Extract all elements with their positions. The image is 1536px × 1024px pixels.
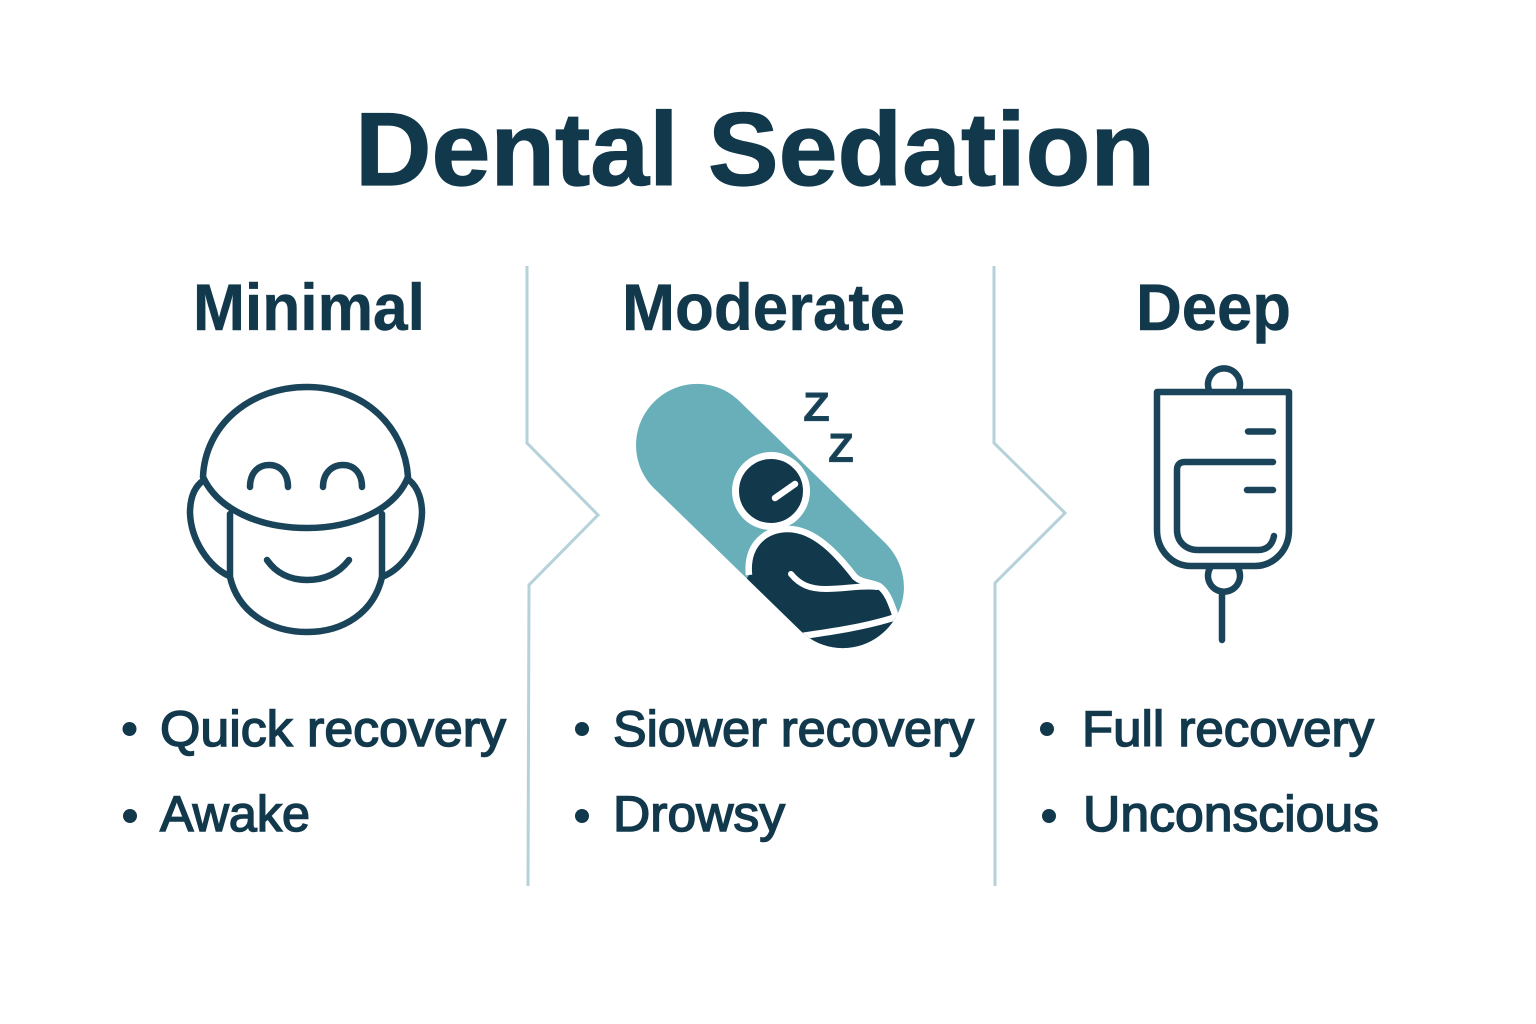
bullet: awake: Awake [160,786,310,842]
bullet: drowsy: Drowsy [613,786,785,842]
snore letters: Z [829,428,853,470]
patient head [736,456,806,526]
icon: IV drip bag [1157,368,1289,640]
infographic canvas [122,108,1378,886]
list: deep effects [1040,701,1379,842]
bullet: slower recovery: Siower recovery [613,701,974,757]
bullet: unconscious: Unconscious [1083,786,1379,842]
icon: smiling face with mask [190,387,422,632]
chevron divider: moderate to deep [994,266,1065,886]
capsule dark base [806,617,896,648]
panel: minimal [122,270,506,842]
panel: deep [1040,270,1379,842]
title: Dental Sedation [355,92,1155,208]
icon: sleeping patient on capsule [636,384,904,648]
bullet: quick recovery: Quick recovery [160,701,506,757]
heading: deep: Deep [1136,270,1291,344]
heading: moderate: Moderate [622,270,905,344]
list: minimal effects [122,701,506,842]
panel: moderate [575,270,974,842]
chevron divider: minimal to moderate [527,266,598,886]
patient body [740,529,896,640]
list: moderate effects [575,701,974,842]
capsule background [636,384,904,648]
heading: minimal: Minimal [193,270,425,344]
snore letters: Z [804,387,829,429]
snore letters [804,387,853,470]
bullet: full recovery: Full recovery [1082,701,1374,757]
